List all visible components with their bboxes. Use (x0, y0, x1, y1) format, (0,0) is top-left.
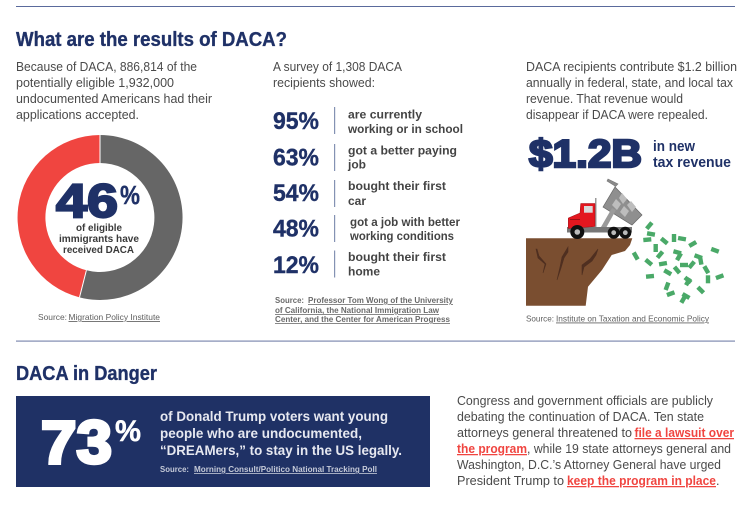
stat row: 63%: 63% (273, 144, 319, 172)
text block: tax contribution: disappear if DACA were repealed. (526, 108, 708, 122)
text block: survey intro: A survey of 1,308 DACA (273, 60, 403, 74)
source: Professor Tom Wong: of California, the National Immigration Law (275, 306, 440, 315)
stat row: 95%: 95% (273, 108, 319, 135)
callout: 73 percent of Trump voters: Morning Consult/Politico National Tracking Poll (194, 465, 377, 474)
stat row: 54%: bought their first (348, 179, 446, 193)
stat row: 48%: 48% (273, 216, 319, 242)
source: Institute on Taxation and Economic Policy: Institute on Taxation and Economic Policy (556, 314, 710, 324)
text block: Congress debate: file a lawsuit over (634, 426, 734, 440)
stat row: 63% (273, 144, 457, 172)
donut chart: 46 percent: immigrants have (59, 234, 139, 245)
text block: Congress debate: the program (457, 442, 527, 456)
text block: Congress debate: . (716, 474, 720, 488)
text block: DACA applications intro: undocumented Americans had their (16, 92, 212, 106)
stat row: 48%: got a job with better (350, 215, 460, 229)
stat: $1.2B in new tax revenue: tax revenue (653, 155, 731, 171)
source: Professor Tom Wong (275, 296, 454, 324)
text block: DACA applications intro (16, 60, 212, 122)
stat row: 63%: got a better paying (348, 144, 457, 158)
text block: DACA applications intro: applications accepted. (16, 108, 139, 122)
source: Institute on Taxation and Economic Policy: Source: (526, 314, 554, 324)
text block: Congress debate (457, 394, 734, 488)
stat row: 95%: working or in school (347, 122, 463, 136)
stat row: 48%: working conditions (349, 229, 454, 243)
stat row: 54% (273, 179, 446, 208)
illustration: cliff (526, 238, 632, 306)
stat row: 95%: are currently (348, 108, 422, 122)
text block: tax contribution (526, 60, 737, 122)
icon: falling money (632, 221, 724, 304)
donut chart: 46 percent (18, 135, 183, 300)
callout: 73 percent of Trump voters: Source: (160, 465, 189, 474)
stat row: 12%: bought their first (348, 250, 446, 264)
text block: Congress debate: Washington, D.C.’s Attorney General have urged (457, 458, 721, 472)
stat row: 48% (273, 215, 460, 243)
source: Professor Tom Wong: Source: (275, 296, 304, 305)
panel: survey of DACA recipients (273, 60, 463, 324)
donut chart: 46 percent: 46 (56, 174, 118, 227)
stat row: 54%: car (348, 194, 366, 208)
donut chart: 46 percent: of eligible (76, 223, 122, 234)
donut chart: 46 percent: % (120, 180, 140, 210)
callout: 73 percent of Trump voters: 73 (41, 409, 112, 476)
stat: $1.2B in new tax revenue: in new (653, 139, 696, 155)
text block: Congress debate: , while 19 state attorneys general and (527, 442, 731, 456)
heading: DACA in Danger: DACA in Danger (16, 363, 157, 385)
text block: Congress debate: keep the program in place (567, 474, 716, 488)
text block: survey intro (273, 60, 403, 90)
text block: tax contribution: revenue. That revenue would (526, 92, 683, 106)
source: Professor Tom Wong: Center, and the Center for American Progress (275, 315, 451, 324)
callout: 73 percent of Trump voters: people who are undocumented, (160, 426, 362, 441)
callout: 73 percent of Trump voters: “DREAMers,” to stay in the US legally. (160, 443, 402, 458)
icon: dump truck (567, 179, 642, 239)
text block: tax contribution: DACA recipients contribute $1.2 billion (526, 60, 737, 74)
text block: Congress debate: Congress and government officials are publicly (457, 394, 714, 408)
text block: DACA applications intro: Because of DACA, 886,814 of the (16, 60, 197, 74)
stat row: 95% (273, 107, 463, 136)
stat: $1.2B in new tax revenue: $1.2B (529, 133, 642, 176)
stat row: 12%: 12% (273, 252, 319, 279)
source: Migration Policy Institute: Migration Policy Institute (68, 312, 160, 322)
text block: survey intro: recipients showed: (273, 76, 375, 90)
title: What are the results of DACA?: What are the results of DACA? (16, 29, 287, 51)
panel: tax revenue (526, 60, 737, 324)
callout: 73 percent of Trump voters: % (115, 415, 141, 448)
callout: 73 percent of Trump voters (16, 396, 430, 487)
callout: 73 percent of Trump voters: of Donald Trump voters want young (160, 409, 388, 424)
text block: DACA applications intro: potentially eligible 1,932,000 (16, 76, 174, 90)
text block: Congress debate: attorneys general threatened to (457, 426, 632, 440)
panel: eligible immigrants (16, 60, 212, 322)
text block: tax contribution: annually in federal, state, and local tax (526, 76, 734, 90)
stat row: 63%: job (347, 158, 366, 172)
stat: $1.2B in new tax revenue (529, 133, 731, 176)
stat row: 12% (273, 250, 446, 279)
source: Professor Tom Wong: Professor Tom Wong of the University (308, 296, 454, 305)
source: Migration Policy Institute: Source: (38, 312, 67, 322)
text block: Congress debate: debating the continuation of DACA. Ten state (457, 410, 704, 424)
donut chart: 46 percent: received DACA (63, 245, 134, 256)
stat row: 12%: home (348, 264, 380, 278)
text block: Congress debate: President Trump to (457, 474, 564, 488)
stat row: 54%: 54% (273, 180, 319, 207)
